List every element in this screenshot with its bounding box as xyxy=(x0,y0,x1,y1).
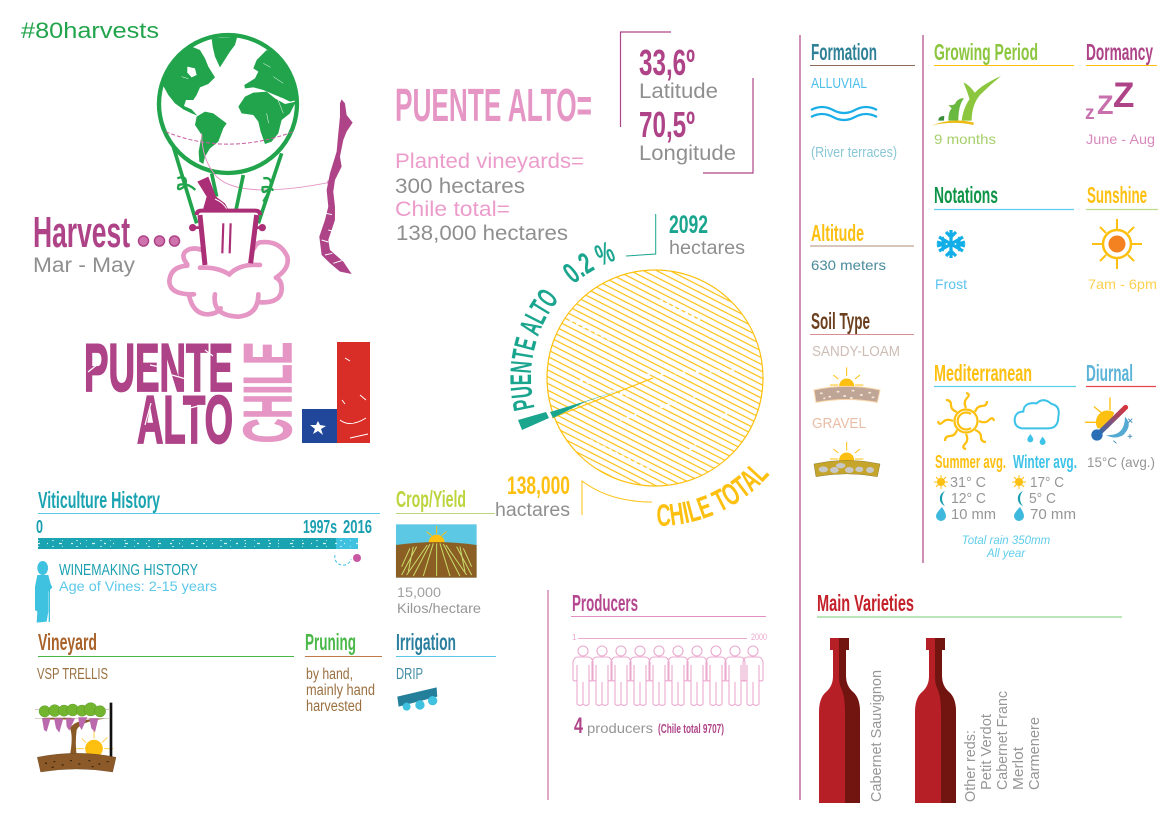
panel: crop yield: Kilos/hectare xyxy=(397,600,481,616)
panel: growing period: Growing Period xyxy=(934,39,1038,65)
title: Puente Alto equals: PUENTE ALTO= xyxy=(395,79,592,131)
summer values: 12° C xyxy=(951,490,986,507)
producers count xyxy=(574,713,724,738)
pictogram: ten producers xyxy=(573,646,763,706)
pie chart: Puente Alto share of Chile total xyxy=(510,242,770,526)
icon: sleeping Z letters: Z xyxy=(1097,90,1114,120)
panel: main varieties xyxy=(817,590,1122,803)
coordinates box: Latitude xyxy=(639,80,718,103)
panel: irrigation xyxy=(396,629,496,711)
panel: formation xyxy=(810,39,915,161)
coordinates box: 70,5º xyxy=(639,104,695,145)
logo: Puente Alto Chile: CHILE xyxy=(230,342,306,443)
label: other reds: Petit Verdot xyxy=(978,713,995,790)
icon: balloon globe and basket xyxy=(159,35,332,265)
icon: map of Chile xyxy=(319,99,353,274)
icon: sandy loam soil xyxy=(814,367,880,402)
panel: soil type: SANDY-LOAM xyxy=(812,343,900,360)
icon: gravel soil xyxy=(814,442,880,477)
icon: winter cloud xyxy=(1015,400,1059,445)
timeline labels: 2016 xyxy=(343,517,372,537)
timeline labels: 1997s xyxy=(303,517,337,537)
label: other reds xyxy=(962,691,1043,802)
hashtag: #80harvests xyxy=(21,18,159,43)
panel: pruning: harvested xyxy=(306,698,362,715)
callout: 2092 hectares: hectares xyxy=(669,238,745,259)
logo: Puente Alto Chile xyxy=(84,330,370,458)
panel: irrigation: DRIP xyxy=(396,666,423,683)
icon: pink cloud xyxy=(169,242,288,317)
label: other reds: Merlot xyxy=(1010,746,1027,790)
icon: sleeping Z letters: Z xyxy=(1113,76,1134,115)
icon: old woman silhouette xyxy=(35,561,52,623)
panel: producers: Producers xyxy=(572,590,638,616)
panel: irrigation: Irrigation xyxy=(396,629,456,655)
winter values: 5° C xyxy=(1029,490,1056,507)
panel: vineyard xyxy=(35,629,294,772)
icon: wine bottle 2 xyxy=(915,638,956,803)
icon: Chilean flag xyxy=(302,342,370,443)
panel: vineyard: Vineyard xyxy=(38,629,97,655)
icons: small sun, moon and drop rows xyxy=(934,475,1026,521)
icon: marker dot and dashed path xyxy=(335,554,361,565)
panel: sunshine xyxy=(1086,182,1158,292)
panel: crop yield: Crop/Yield xyxy=(396,486,466,512)
panel: growing period: 9 months xyxy=(934,131,996,147)
panel: altitude: 630 meters xyxy=(811,257,886,273)
label: Puente Alto: PUENTE ALTO xyxy=(510,290,557,412)
panel: pruning: mainly hand xyxy=(306,682,375,699)
planted vineyards stats: 138,000 hectares xyxy=(396,222,568,245)
panel: viticulture history: Age of Vines: 2-15 years xyxy=(59,578,217,594)
icon: sun xyxy=(1092,219,1142,269)
winter values: 17° C xyxy=(1030,474,1064,491)
callout: 138,000 hectares: 138,000 xyxy=(507,472,570,500)
panel: diurnal: Diurnal xyxy=(1086,360,1133,386)
heading: Harvest: Harvest xyxy=(33,208,130,257)
winter values xyxy=(1029,474,1076,523)
producers count: (Chile total 9707) xyxy=(658,721,724,736)
winter values: 70 mm xyxy=(1030,506,1076,523)
panel: formation: ALLUVIAL xyxy=(811,75,867,92)
panel: altitude: Altitude xyxy=(811,220,864,246)
callout: 138,000 hectares: hactares xyxy=(495,500,570,521)
panel: pruning xyxy=(305,629,382,715)
panel: sunshine: 7am - 6pm xyxy=(1088,276,1157,292)
panel: growing period xyxy=(932,39,1074,147)
planted vineyards stats xyxy=(395,150,584,245)
panel: diurnal: 15°C (avg.) xyxy=(1087,454,1155,470)
icon: sun moon thermometer xyxy=(1085,397,1132,443)
logo: Puente Alto Chile: ALTO xyxy=(137,382,233,458)
note: total rain: All year xyxy=(986,548,1026,560)
panel: viticulture history: Viticulture History xyxy=(38,487,160,513)
panel: pruning: by hand, xyxy=(306,666,353,683)
panel: vineyard: VSP TRELLIS xyxy=(37,666,108,683)
scale line xyxy=(572,632,767,642)
winemaking text: WINEMAKING HISTORY xyxy=(59,562,198,579)
planted vineyards stats: Planted vineyards= xyxy=(395,150,584,173)
panel: main varieties: Main Varieties xyxy=(817,590,914,616)
panel: dormancy xyxy=(1085,39,1157,147)
summer values xyxy=(950,474,996,523)
panel: notations: Notations xyxy=(934,182,998,208)
note: total rain: Total rain 350mm xyxy=(962,535,1051,547)
producers count: producers xyxy=(587,720,653,736)
timeline labels xyxy=(36,517,372,537)
label: 0.2 percent: 0.2 % xyxy=(563,242,615,282)
icon: sleeping Z letters: z xyxy=(1085,103,1094,124)
panel: crop yield: 15,000 xyxy=(397,584,441,600)
icon: sleeping Z letters xyxy=(1085,76,1134,124)
panel: diurnal xyxy=(1085,360,1156,470)
icon: snowflake xyxy=(937,230,965,258)
summer values: 31° C xyxy=(950,474,986,491)
coordinates box: 33,6º xyxy=(639,42,695,83)
icon: water waves xyxy=(811,107,877,120)
panel: notations xyxy=(934,182,1074,292)
callout: 138,000 hectares xyxy=(495,472,652,521)
coordinates box: Longitude xyxy=(639,142,736,165)
planted vineyards stats: Chile total= xyxy=(395,198,510,221)
panel: mediterranean climate: Mediterranean xyxy=(934,360,1032,386)
harvest label xyxy=(33,208,180,277)
scale line: 2000 xyxy=(751,632,767,642)
producers count: 4 xyxy=(574,713,584,738)
label: other reds: Carmenere xyxy=(1026,717,1043,790)
logo: Puente Alto Chile: PUENTE xyxy=(84,330,233,406)
harvest dates: Mar - May xyxy=(33,254,136,277)
icon: three dots xyxy=(138,236,180,246)
icon: sprouts xyxy=(932,76,1001,125)
panel: notations: Frost xyxy=(935,276,967,292)
panel: mediterranean climate xyxy=(934,360,1077,560)
coordinates box xyxy=(620,32,753,173)
icon: vine on trellis xyxy=(35,703,116,772)
label: winter average: Winter avg. xyxy=(1013,452,1077,472)
callout: 2092 hectares: 2092 xyxy=(669,211,708,239)
panel: producers xyxy=(571,590,767,738)
label: summer average: Summer avg. xyxy=(935,452,1006,472)
panel: crop yield xyxy=(396,486,495,616)
icon: wine bottle 1 xyxy=(819,638,860,803)
panel: dormancy: June - Aug xyxy=(1086,131,1155,147)
balloon illustration xyxy=(159,35,332,317)
panel: formation: Formation xyxy=(811,39,877,65)
panel: soil type: GRAVEL xyxy=(812,415,866,432)
scale line: 1 xyxy=(572,633,577,642)
label: other reds: Cabernet Franc xyxy=(994,691,1011,790)
icon: vineyard field xyxy=(396,524,477,578)
panel: soil type: Soil Type xyxy=(811,308,870,334)
callout: 2092 hectares xyxy=(626,211,745,259)
planted vineyards stats: 300 hectares xyxy=(395,175,525,198)
panel: soil type xyxy=(810,308,914,477)
timeline labels: 0 xyxy=(36,517,43,537)
summer values: 10 mm xyxy=(951,506,996,523)
icon: summer sun xyxy=(938,393,994,449)
timeline bar xyxy=(38,538,358,549)
note: total rain xyxy=(962,535,1051,560)
label: other reds: Other reds: xyxy=(962,730,979,802)
panel: viticulture history xyxy=(35,487,380,623)
panel: altitude xyxy=(810,220,914,273)
label: Chile total: CHILE TOTAL xyxy=(657,466,770,526)
panel: pruning: Pruning xyxy=(305,629,356,655)
panel: formation: (River terraces) xyxy=(811,144,897,161)
icon: drip pipe xyxy=(397,687,437,711)
label: Cabernet Sauvignon: Cabernet Sauvignon xyxy=(868,670,885,802)
